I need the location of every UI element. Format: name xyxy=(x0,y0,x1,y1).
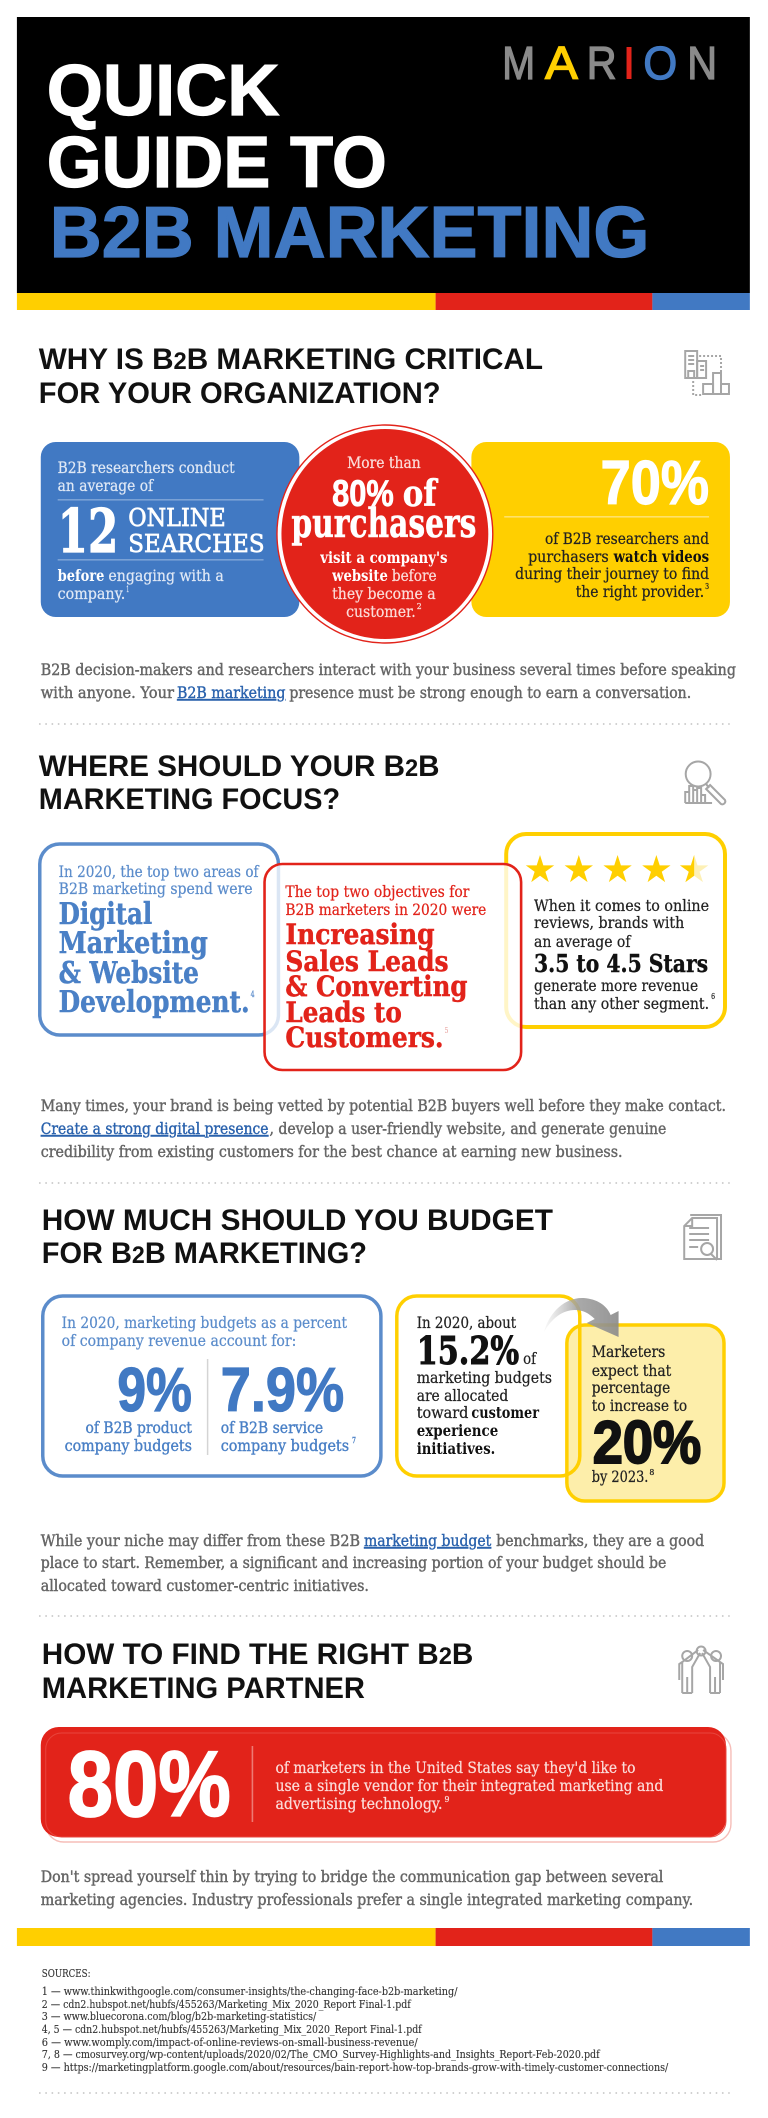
color band bottom xyxy=(17,1928,750,1946)
panel: 80 percent single vendor xyxy=(41,1727,731,1842)
panel: 20 percent forecast: 20% xyxy=(593,1409,701,1476)
panel: online searches xyxy=(41,442,299,617)
panel: 15.2 percent customer experience: customer xyxy=(471,1403,539,1422)
panel: marketing spend outline: & Website xyxy=(59,956,199,991)
panel: budget percentages: of B2B product xyxy=(86,1418,192,1437)
heading: where to focus: WHERE SHOULD YOUR B2B xyxy=(39,750,440,783)
text block: budget paragraph: marketing budget xyxy=(364,1532,492,1550)
title: B2B MARKETING xyxy=(50,193,649,273)
logo: Marion: N xyxy=(687,37,717,89)
panel: online searches: SEARCHES xyxy=(128,530,265,558)
panel: 20 percent forecast: to increase to xyxy=(592,1396,687,1415)
panel: budget percentages: company budgets xyxy=(221,1436,349,1455)
text block: budget paragraph: benchmarks, they are a good xyxy=(496,1532,704,1550)
text block: focus paragraph xyxy=(41,1097,726,1161)
panel: 70 percent: of B2B researchers and xyxy=(545,529,709,548)
icon: buildings xyxy=(685,351,729,395)
text block: sources: 1 — www.thinkwithgoogle.com/consumer-insights/the-changing-face-b2b-marketing/ xyxy=(42,1985,458,1998)
panel: online searches: before xyxy=(58,566,104,585)
text block: intro paragraph: presence must be strong enough to earn a conversation. xyxy=(289,684,691,702)
panel: 15.2 percent customer experience: marketing budgets xyxy=(417,1368,552,1387)
panel: budget percentages: In 2020, marketing budgets as a percent xyxy=(62,1313,348,1332)
panel: marketing spend outline xyxy=(40,844,278,1035)
panel: budget percentages: company budgets xyxy=(65,1436,192,1455)
panel: 15.2 percent customer experience xyxy=(397,1296,580,1476)
panel: 70 percent: the right provider. xyxy=(576,582,704,601)
panel: objectives outline: 5 xyxy=(445,1026,449,1035)
heading: where to focus: MARKETING FOCUS? xyxy=(39,783,340,816)
heading: budget: HOW MUCH SHOULD YOU BUDGET xyxy=(42,1204,553,1237)
text block: sources: 9 — https://marketingplatform.google.com/about/resources/bain-report-how-top-brands-grow-with-timely-customer-connections/ xyxy=(42,2061,669,2074)
panel: objectives outline: & Converting xyxy=(285,970,467,1003)
text block: sources: 6 — www.womply.com/impact-of-online-reviews-on-small-business-revenue/ xyxy=(42,2036,418,2049)
text block: sources: 7, 8 — cmosurvey.org/wp-content/uploads/2020/02/The_CMO_Survey-Highlights-and_Insights_Report-Feb-2020.pdf xyxy=(42,2048,601,2061)
panel: marketing spend outline: Marketing xyxy=(59,926,208,961)
panel: 80 percent of purchasers circle: visit a company's xyxy=(319,548,448,567)
text block: budget paragraph xyxy=(41,1532,704,1595)
arrow: increase xyxy=(544,1298,619,1337)
panel: 80 percent single vendor: 80% xyxy=(68,1732,231,1836)
header banner xyxy=(17,17,750,293)
title xyxy=(47,51,649,273)
panel: online searches: engaging with a xyxy=(108,566,224,585)
text block: closing paragraph: Don't spread yourself thin by trying to bridge the communication gap between several xyxy=(41,1868,663,1886)
panel: 20 percent forecast xyxy=(567,1325,724,1501)
text block: intro paragraph: B2B marketing xyxy=(177,684,286,702)
panel: 80 percent single vendor: 9 xyxy=(445,1795,450,1804)
panel: 20 percent forecast: Marketers xyxy=(592,1342,665,1361)
panel: budget percentages xyxy=(43,1296,381,1476)
panel: 20 percent forecast: expect that xyxy=(592,1361,672,1380)
heading: find partner: MARKETING PARTNER xyxy=(42,1672,365,1705)
panel: online searches: an average of xyxy=(58,476,154,495)
text block: closing paragraph: marketing agencies. Industry professionals prefer a single integrated marketing company. xyxy=(41,1891,693,1909)
panel: 15.2 percent customer experience: experience xyxy=(417,1421,498,1440)
panel: star reviews outline xyxy=(506,834,725,1027)
panel: 80 percent of purchasers circle xyxy=(277,425,493,643)
panel: online searches: 12 xyxy=(58,497,118,567)
panel: budget percentages: 7 xyxy=(352,1436,356,1445)
panel: 80 percent of purchasers circle: purchasers xyxy=(291,501,476,547)
panel: budget percentages: of company revenue account for: xyxy=(62,1331,296,1350)
icon: partners high five xyxy=(679,1646,723,1693)
panel: 80 percent single vendor: advertising technology. xyxy=(275,1794,443,1813)
icon: budget document xyxy=(684,1215,721,1260)
panel: online searches: company. xyxy=(58,584,125,603)
panel: objectives outline: Customers. xyxy=(285,1021,444,1054)
panel: 15.2 percent customer experience: toward xyxy=(417,1403,468,1422)
panel: star reviews outline: When it comes to online xyxy=(534,896,709,915)
text block: sources: 2 — cdn2.hubspot.net/hubfs/455263/Marketing_Mix_2020_Report Final-1.pdf xyxy=(42,1998,412,2011)
panel: 80 percent of purchasers circle: before xyxy=(392,566,437,585)
panel: 70 percent: during their journey to find xyxy=(515,564,709,583)
panel: marketing spend outline: 4 xyxy=(251,990,255,999)
heading: budget: FOR B2B MARKETING? xyxy=(42,1237,367,1270)
logo: Marion: R xyxy=(587,37,617,89)
panel: 80 percent of purchasers circle: of xyxy=(403,473,439,515)
panel: 20 percent forecast: percentage xyxy=(592,1378,670,1397)
panel: 15.2 percent customer experience: are allocated xyxy=(417,1386,508,1405)
panel: objectives outline: B2B marketers in 2020 were xyxy=(285,900,486,919)
panel: 70 percent: purchasers xyxy=(528,547,609,566)
panel: 15.2 percent customer experience: In 2020, about xyxy=(417,1313,517,1332)
panel: objectives outline: Increasing xyxy=(285,918,435,951)
panel: 15.2 percent customer experience: of xyxy=(523,1349,537,1368)
panel: marketing spend outline: Development. xyxy=(59,985,250,1020)
panel: budget percentages: 9% xyxy=(117,1356,192,1425)
heading: find partner xyxy=(42,1638,473,1705)
panel: 80 percent single vendor: use a single vendor for their integrated marketing and xyxy=(275,1776,663,1795)
text block: intro paragraph: with anyone. Your xyxy=(41,684,175,702)
panel: 20 percent forecast: by 2023. xyxy=(592,1467,648,1486)
panel: 15.2 percent customer experience: 15.2% xyxy=(417,1328,519,1373)
panel: star reviews outline: than any other segment. xyxy=(534,994,709,1013)
panel: 80 percent of purchasers circle: More than xyxy=(347,453,421,472)
panel: online searches: B2B researchers conduct xyxy=(58,458,235,477)
panel: 70 percent: watch videos xyxy=(613,547,709,566)
panel: star reviews outline: generate more revenue xyxy=(534,976,698,995)
text block: sources xyxy=(42,1967,669,2074)
title: QUICK xyxy=(47,51,280,131)
text block: sources: 4, 5 — cdn2.hubspot.net/hubfs/455263/Marketing_Mix_2020_Report Final-1.pdf xyxy=(42,2023,422,2036)
panel: objectives outline: Sales Leads xyxy=(285,945,449,978)
logo: Marion xyxy=(502,37,717,89)
heading: find partner: HOW TO FIND THE RIGHT B2B xyxy=(42,1638,473,1671)
icon: magnifier with chart xyxy=(685,762,725,804)
panel: objectives outline: Leads to xyxy=(285,996,402,1029)
heading: why critical: WHY IS B2B MARKETING CRITICAL xyxy=(39,343,543,376)
panel: star reviews outline: reviews, brands with xyxy=(534,913,684,932)
panel: objectives outline xyxy=(265,864,521,1070)
text block: focus paragraph: Create a strong digital presence xyxy=(41,1120,269,1138)
panel: online searches: ONLINE xyxy=(128,504,226,532)
panel: marketing spend outline: Digital xyxy=(59,897,152,932)
text block: budget paragraph: allocated toward customer-centric initiatives. xyxy=(41,1577,369,1595)
text block: intro paragraph xyxy=(41,661,736,702)
text block: sources: 3 — www.bluecorona.com/blog/b2b-marketing-statistics/ xyxy=(42,2010,317,2023)
color band top xyxy=(17,293,750,310)
panel: marketing spend outline: B2B marketing spend were xyxy=(59,879,253,898)
logo: Marion: M xyxy=(502,37,535,89)
title: GUIDE TO xyxy=(47,123,387,203)
heading: where to focus xyxy=(39,750,440,816)
panel: 80 percent of purchasers circle: website xyxy=(331,566,388,585)
panel: star reviews outline: 6 xyxy=(711,992,715,1001)
heading: budget xyxy=(42,1204,553,1270)
panel: 70 percent xyxy=(471,442,730,617)
text block: focus paragraph: , develop a user-friendly website, and generate genuine xyxy=(270,1120,666,1138)
heading: why critical xyxy=(39,343,543,410)
panel: 80 percent of purchasers circle: 80% xyxy=(332,473,394,514)
panel: marketing spend outline: In 2020, the top two areas of xyxy=(59,862,259,881)
text block: focus paragraph: credibility from existing customers for the best chance at earning new business. xyxy=(41,1143,623,1161)
panel: budget percentages: of B2B service xyxy=(221,1418,323,1437)
panel: objectives outline: The top two objectives for xyxy=(285,882,470,901)
panel: 70 percent: 70% xyxy=(601,449,709,518)
panel: online searches: 1 xyxy=(126,585,129,594)
panel: 80 percent of purchasers circle: they become a xyxy=(332,584,436,603)
logo: Marion: O xyxy=(643,37,677,89)
panel: 70 percent: 3 xyxy=(705,582,709,591)
panel: 80 percent single vendor: of marketers in the United States say they'd like to xyxy=(275,1758,635,1777)
text block: budget paragraph: While your niche may differ from these B2B xyxy=(41,1532,360,1550)
panel: budget percentages: 7.9% xyxy=(221,1356,344,1425)
logo: Marion: A xyxy=(545,37,578,89)
icon: star rating xyxy=(526,855,708,882)
panel: star reviews outline: an average of xyxy=(534,932,631,951)
panel: star reviews outline: 3.5 to 4.5 Stars xyxy=(534,950,708,978)
text block: closing paragraph xyxy=(41,1868,693,1909)
panel: 20 percent forecast: 8 xyxy=(649,1468,654,1477)
panel: 15.2 percent customer experience: initiatives. xyxy=(417,1439,495,1458)
text block: sources: SOURCES: xyxy=(42,1967,90,1980)
text block: budget paragraph: place to start. Remember, a significant and increasing portion of your budget should be xyxy=(41,1554,666,1572)
text block: focus paragraph: Many times, your brand is being vetted by potential B2B buyers well before they make contact. xyxy=(41,1097,726,1115)
panel: 80 percent of purchasers circle: customer. xyxy=(346,602,416,621)
panel: 80 percent of purchasers circle: 2 xyxy=(417,602,422,611)
heading: why critical: FOR YOUR ORGANIZATION? xyxy=(39,377,441,410)
